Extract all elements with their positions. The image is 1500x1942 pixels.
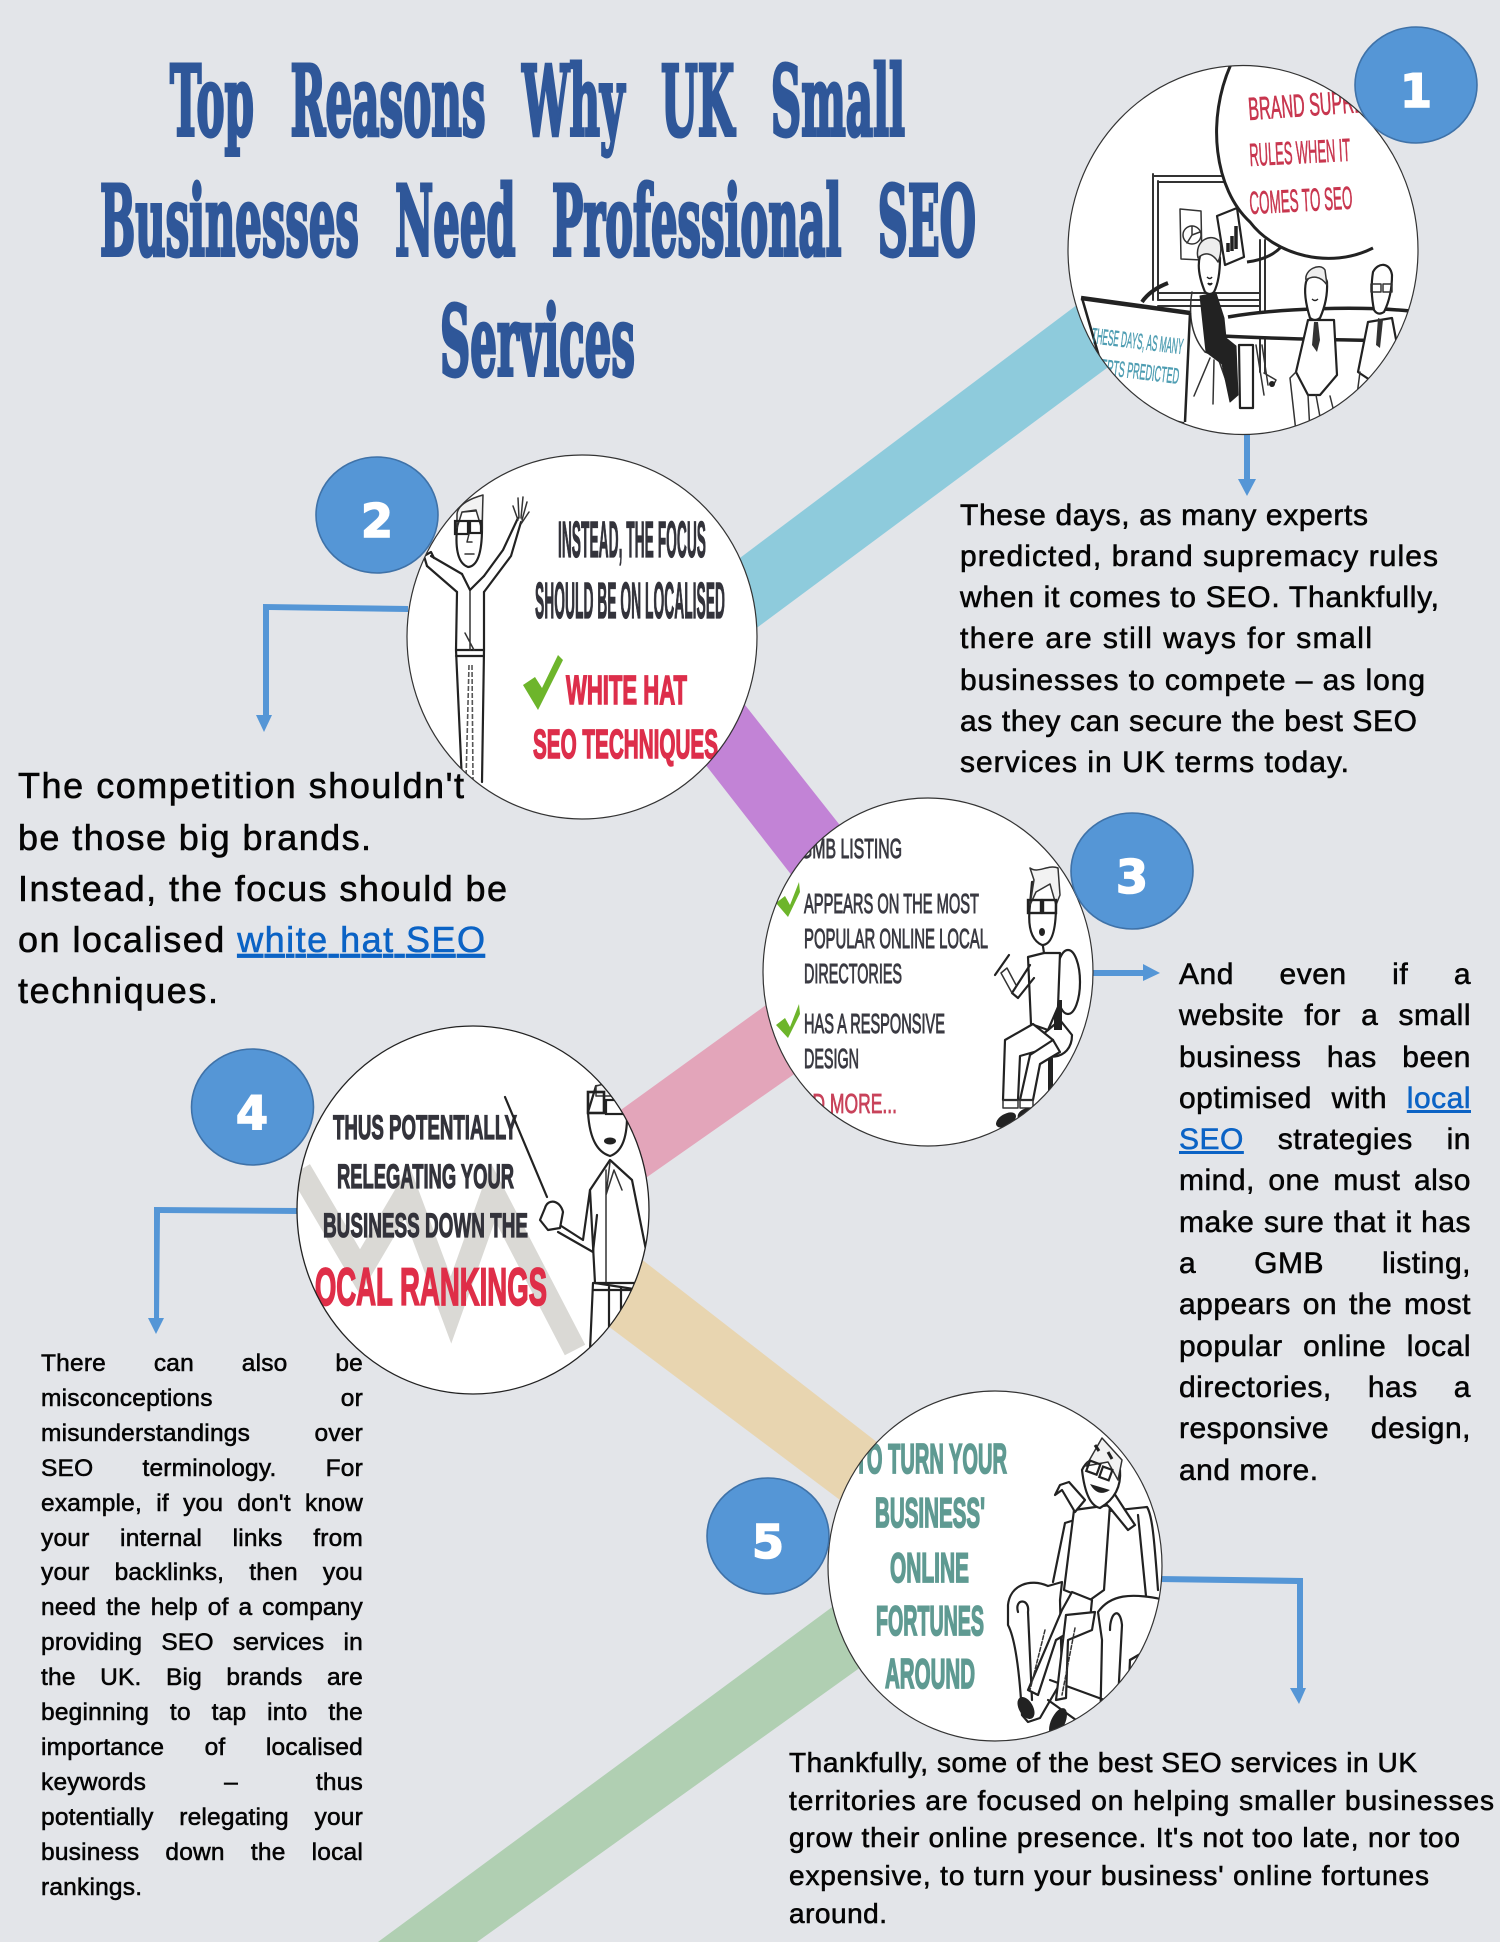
connector band: pink — [600, 966, 820, 1210]
text block 3 — [1178, 958, 1471, 1487]
text block 3: and more. — [1179, 1454, 1319, 1487]
checklist text: DESIGN — [804, 1043, 859, 1074]
heading text: THUS POTENTIALLY — [333, 1109, 517, 1147]
badge: number 5: 5 — [752, 1515, 784, 1569]
text block 4: providing SEO services in — [41, 1629, 363, 1656]
text block 5 — [789, 1747, 1494, 1929]
text block 4: rankings. — [41, 1874, 142, 1901]
checklist text: DIRECTORIES — [804, 958, 902, 989]
panel: circle 1 boardroom illustration — [1067, 64, 1419, 436]
badge: number 4 — [192, 1049, 314, 1165]
speaker — [1191, 238, 1238, 404]
text block 3: popular online local — [1179, 1330, 1471, 1363]
text block 1: there are still ways for small — [960, 622, 1372, 655]
text block 5: grow their online presence. It's not too late, nor too — [789, 1822, 1460, 1853]
text block 4: need the help of a company — [41, 1594, 363, 1621]
red text — [533, 667, 718, 767]
text block 2: be those big brands. — [18, 817, 371, 858]
text block 1 — [959, 499, 1439, 779]
text block 4: There can also be — [41, 1350, 363, 1377]
panel: circle 4 local rankings illustration — [297, 1026, 649, 1394]
whiteboard — [1153, 174, 1270, 372]
panel: circle 1 boardroom illustration: THESE DAYS, AS MANY — [1090, 323, 1185, 359]
text block 2: The competition shouldn't — [18, 765, 464, 806]
text block 3: SEO strategies in — [1179, 1123, 1471, 1156]
red text: WHITE HAT — [566, 667, 687, 713]
speech bubble text: BRAND SUPREM — [1247, 82, 1379, 127]
checklist text: APPEARS ON THE MOST — [804, 888, 979, 919]
red text: SEO TECHNIQUES — [533, 721, 718, 767]
seated man — [1290, 267, 1337, 432]
connector band: green — [378, 1557, 900, 1942]
text block 4: example, if you don't know — [41, 1490, 363, 1517]
text block 4: your internal links from — [41, 1525, 363, 1552]
text block 3: appears on the most — [1179, 1288, 1471, 1321]
connector band: purple — [680, 648, 880, 963]
checklist text — [800, 833, 988, 1074]
title: Services — [440, 285, 635, 398]
arrow: circle 4 to text — [148, 1207, 299, 1334]
seated man — [993, 867, 1080, 1131]
connector band: blue — [700, 250, 1150, 670]
arrow: circle 1 to text — [1238, 435, 1256, 496]
panel: circle 5 fortunes illustration: TO TURN YOUR — [855, 1435, 1007, 1482]
heading text: BUSINESS DOWN THE — [323, 1207, 528, 1245]
heading text: RELEGATING YOUR — [337, 1158, 514, 1196]
text block 3: And even if a — [1179, 958, 1471, 991]
table — [1222, 308, 1410, 408]
speech bubble text: COMES TO SEO — [1248, 180, 1353, 221]
connector band: tan — [580, 1227, 900, 1530]
teal text: BUSINESS' — [875, 1489, 985, 1536]
text: INSTEAD, THE FOCUS — [558, 511, 706, 568]
speech bubble text: RULES WHEN IT — [1248, 132, 1351, 173]
text block 1: services in UK terms today. — [960, 746, 1349, 779]
panel: circle 5 fortunes illustration — [828, 1391, 1165, 1741]
text block 1: predicted, brand supremacy rules — [960, 540, 1438, 573]
text block 3: optimised with local — [1179, 1082, 1471, 1115]
text block 3: a GMB listing, — [1179, 1247, 1471, 1280]
icon: green checks — [776, 882, 800, 917]
panel: circle 1 boardroom illustration: EXPERTS PREDICTED — [1081, 352, 1181, 389]
badge: number 5 — [707, 1478, 829, 1594]
speech bubble — [1224, 175, 1271, 183]
text block 1: as they can secure the best SEO — [960, 705, 1417, 738]
teal text: AROUND — [885, 1650, 975, 1697]
text block 3: website for a small — [1179, 999, 1471, 1032]
text block 5: territories are focused on helping smaller businesses — [789, 1785, 1494, 1816]
text block 5: expensive, to turn your business' online fortunes — [789, 1860, 1429, 1891]
panel: circle 3 checklist illustration: AND MORE... — [788, 1088, 897, 1119]
badge: number 3 — [1071, 813, 1193, 929]
text block 4: beginning to tap into the — [41, 1699, 363, 1726]
text block 1: These days, as many experts — [960, 499, 1368, 532]
man with pointer — [505, 1080, 646, 1350]
badge: number 1: 1 — [1400, 64, 1432, 118]
panel: circle 3 checklist illustration — [763, 798, 1093, 1146]
badge: number 3: 3 — [1116, 850, 1148, 904]
text block 5: Thankfully, some of the best SEO services in UK — [789, 1747, 1417, 1778]
text block 4: misconceptions or — [41, 1385, 363, 1412]
text block 4: keywords – thus — [41, 1769, 363, 1796]
badge: number 2: 2 — [361, 494, 393, 548]
red text: LOCAL RANKINGS — [298, 1258, 547, 1317]
text block 3: directories, has a — [1179, 1371, 1471, 1404]
text block 5: around. — [789, 1898, 887, 1929]
text block 4: the UK. Big brands are — [41, 1664, 363, 1691]
arrow: circle 5 to text — [1159, 1576, 1306, 1704]
text block 4: misunderstandings over — [41, 1420, 363, 1447]
man in armchair — [1008, 1438, 1165, 1739]
title — [100, 45, 976, 398]
text block 4: importance of localised — [41, 1734, 363, 1761]
podium — [1081, 283, 1190, 424]
speech bubble text — [1248, 92, 1360, 214]
arrow: circle 2 to text — [256, 604, 408, 732]
badge: number 1 — [1355, 27, 1477, 143]
teal text: FORTUNES — [876, 1597, 984, 1644]
text block 3: business has been — [1179, 1041, 1471, 1074]
text block 1: businesses to compete – as long — [960, 664, 1425, 697]
text block 4 — [40, 1350, 364, 1901]
text block 2: Instead, the focus should be — [18, 868, 507, 909]
standing man — [424, 495, 529, 782]
text: SHOULD BE ON LOCALISED — [535, 572, 725, 629]
charts on whiteboard — [1180, 208, 1244, 265]
panel: circle 2 white hat illustration — [407, 455, 757, 819]
text block 4: your backlinks, then you — [41, 1559, 363, 1586]
heading text — [323, 1109, 528, 1245]
checklist text: HAS A RESPONSIVE — [804, 1008, 945, 1039]
text block 4: business down the local — [41, 1839, 363, 1866]
text block 4: potentially relegating your — [41, 1804, 363, 1831]
text block 4: SEO terminology. For — [41, 1455, 363, 1482]
text block 3: responsive design, — [1179, 1412, 1471, 1445]
icon: green check — [523, 655, 563, 710]
badge: number 2 — [316, 457, 438, 573]
teal text: ONLINE — [890, 1544, 969, 1591]
checklist text: POPULAR ONLINE LOCAL — [804, 923, 988, 954]
chart zigzag — [300, 1170, 575, 1350]
checklist text: GMB LISTING — [800, 833, 902, 864]
arrow: circle 3 to text — [1093, 964, 1160, 981]
text block 2: on localised white hat SEO — [18, 919, 485, 960]
man with glasses — [1357, 265, 1398, 395]
text block 2 — [18, 765, 507, 1011]
text block 3: make sure that it has — [1179, 1206, 1471, 1239]
text block 2: techniques. — [18, 970, 218, 1011]
badge: number 4: 4 — [236, 1086, 268, 1140]
text block 3: mind, one must also — [1179, 1164, 1471, 1197]
heading text — [535, 520, 725, 620]
text block 1: when it comes to SEO. Thankfully, — [959, 581, 1439, 614]
teal text — [855, 1435, 1007, 1697]
